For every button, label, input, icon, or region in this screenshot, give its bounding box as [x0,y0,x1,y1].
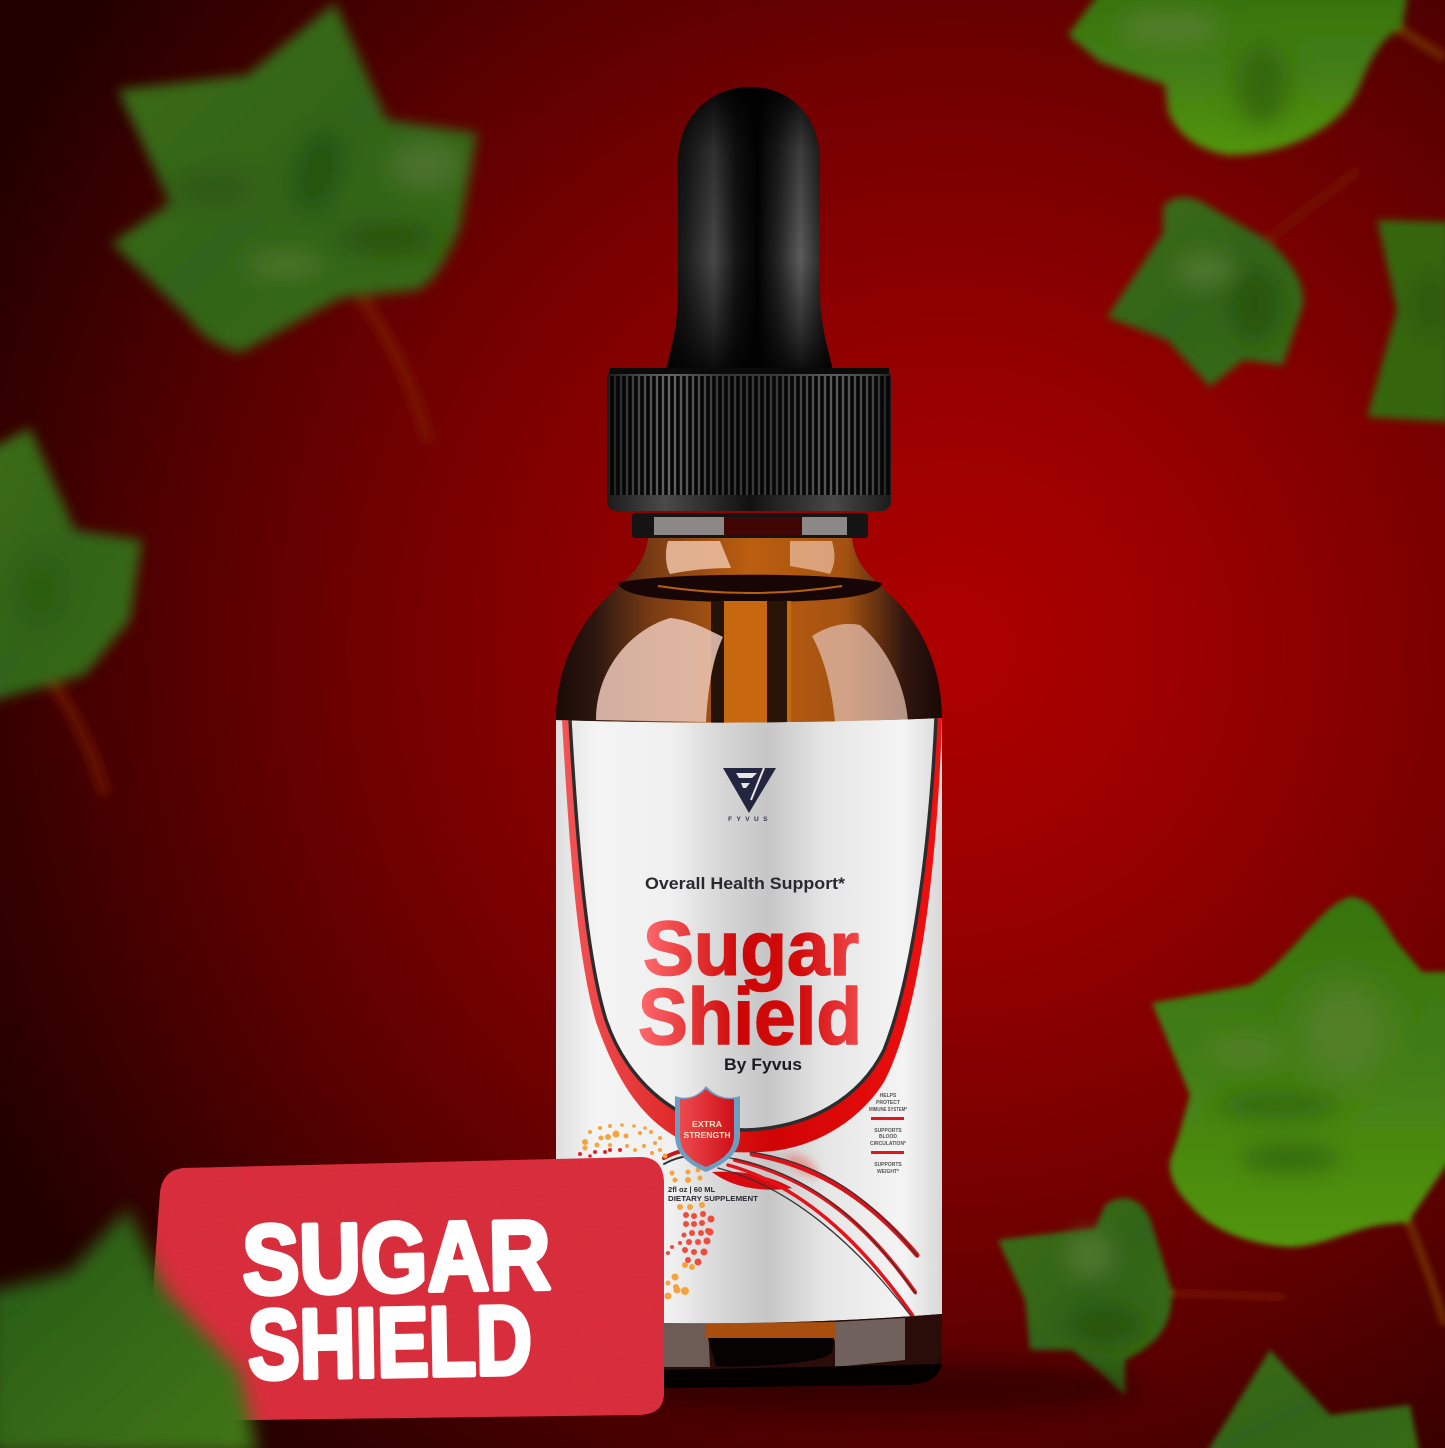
label benefits list: WEIGHT* [877,1169,899,1175]
dropper collar [607,368,891,511]
label product name: Sugar [643,906,859,992]
badge title: SHIELD [247,1285,533,1400]
bottom glass [664,1312,942,1388]
label swooshes [664,1150,918,1316]
dropper bulb [666,87,832,368]
label volume text: DIETARY SUPPLEMENT [668,1194,758,1203]
product label [556,718,942,1323]
label benefits list: HELPS [880,1093,897,1099]
label byline: By Fyvus [724,1055,802,1074]
label benefits list: IMMUNE SYSTEM* [869,1107,907,1113]
label dark inner line [570,718,936,1130]
leaf: top left [112,3,477,442]
bottle [556,85,942,1388]
badge title: SUGAR [241,1199,551,1315]
dot swirl [578,1123,714,1300]
badge title [241,1199,553,1400]
leaf: lower middle right [998,1198,1285,1395]
leaf: right edge [1367,220,1445,422]
red name badge [153,1157,664,1420]
label benefits list: SUPPORTS [874,1128,902,1134]
label benefits list [869,1093,907,1175]
leaf: upper right middle [1107,170,1358,387]
liquid level [618,575,882,602]
leaf: top right [1068,0,1445,155]
leaf: left edge [0,428,142,795]
leaf: bottom right [1205,1350,1420,1448]
label brand logo: FYVUS [728,816,772,823]
neck highlights [666,541,834,574]
leaf: large lower right [1152,897,1445,1325]
label volume text: 2fl oz | 60 ML [668,1185,716,1194]
shield badge [675,1086,740,1172]
shoulder highlights [596,618,908,722]
label volume text [668,1186,758,1201]
label product name [639,920,859,1046]
shield badge: STRENGTH [684,1130,731,1140]
label brand logo [723,768,776,823]
label tagline: Overall Health Support* [645,874,845,893]
label benefits list: BLOOD [879,1134,897,1140]
leaf: bottom left foreground [0,1208,258,1448]
label benefits list: SUPPORTS [874,1162,902,1168]
label product name: Shield [638,972,862,1061]
shield badge: EXTRA [692,1119,722,1129]
bottle shadow [620,1364,1140,1412]
neck ring [632,513,868,538]
glass body [556,538,942,1385]
dropper tube [711,601,791,723]
label benefits list: CIRCULATION* [870,1141,906,1147]
label red band [562,718,942,1152]
label benefits list: PROTECT [876,1100,900,1106]
